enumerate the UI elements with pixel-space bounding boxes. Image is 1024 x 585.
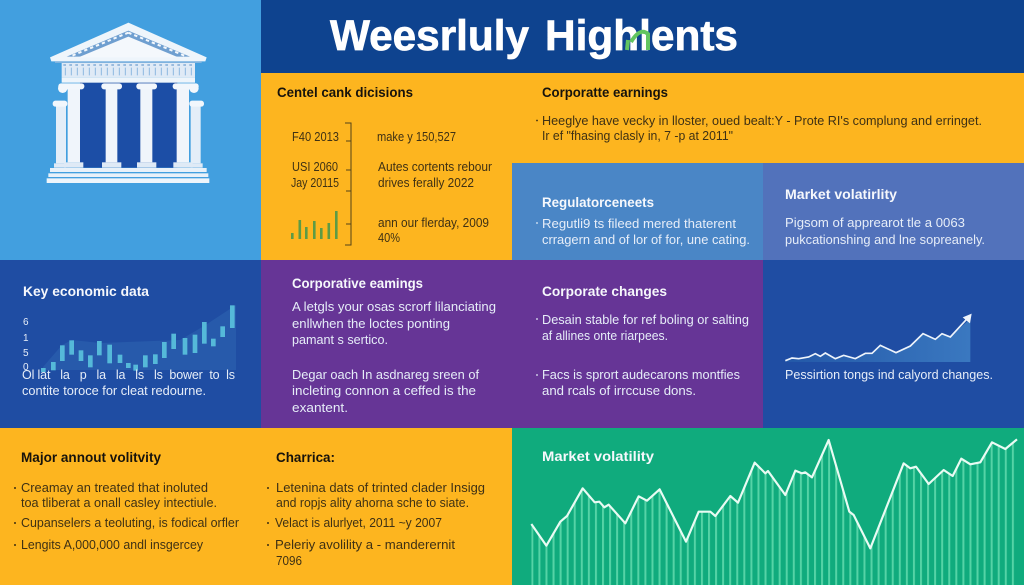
announcements bullets: Cupanselers a teoluting, is fodical orfler <box>21 516 239 530</box>
axis labels: 1 <box>23 333 29 344</box>
panel: market volatility chart <box>512 428 1024 585</box>
panel: temple hero <box>0 0 261 260</box>
axis labels <box>23 317 29 373</box>
announcements bullets: Creamay an treated that inoluted <box>21 481 208 495</box>
date labels <box>291 130 339 190</box>
icon: classical bank building <box>47 23 209 183</box>
title <box>330 12 738 60</box>
corporative text: A letgls your osas scrorf lilanciating <box>292 300 496 314</box>
decision notes: Autes cortents rebour <box>378 160 492 174</box>
area line chart <box>531 439 1017 585</box>
title: Weesrluly <box>330 12 529 60</box>
data text <box>22 368 235 398</box>
data text: Ol lat la p la la ls ls bower to ls <box>22 368 235 382</box>
icon: green accent in title <box>627 32 648 50</box>
axis labels: 0 <box>23 362 29 373</box>
panel: central bank decisions <box>261 73 512 260</box>
heading: Charrica: <box>276 450 335 465</box>
earnings bullet text: Ir ef "fhasing clasly in, 7 -p at 2011" <box>542 129 733 143</box>
corporate changes text <box>536 313 749 398</box>
mini bar chart <box>291 211 338 239</box>
corporative text: incleting connon a ceffed is the <box>292 384 476 398</box>
corporative text: enllwhen the loctes ponting <box>292 317 450 331</box>
corporative text <box>292 300 496 415</box>
regulatory text: Regutli9 ts fileed mered thaterent <box>542 217 737 231</box>
heading: Corporatte earnings <box>542 85 668 100</box>
volatility text <box>785 216 985 247</box>
data text: contite toroce for cleat redourne. <box>22 384 206 398</box>
panel: position changes <box>763 260 1024 428</box>
corporate changes text: Desain stable for ref boling or salting <box>542 313 749 327</box>
corporate changes text: af allines onte riarpees. <box>542 329 668 343</box>
decision notes: ann our flerday, 2009 <box>378 216 489 230</box>
panel: market volatility note <box>763 163 1024 260</box>
corporative text: exantent. <box>292 401 348 415</box>
date labels: USI 2060 <box>292 160 338 174</box>
panel: key economic data <box>0 260 261 428</box>
announcements bullets: Lengits A,000,000 andl insgercey <box>21 538 204 552</box>
decision notes <box>377 130 492 245</box>
heading: Major annout volitvity <box>21 450 161 465</box>
panel: title banner <box>261 0 1024 73</box>
title: Highlents <box>545 12 738 60</box>
date labels: Jay 20115 <box>291 176 339 190</box>
earnings bullet text <box>536 114 982 143</box>
charrica bullets: Peleriy avolility a - manderernit <box>275 538 456 552</box>
decision notes: drives ferally 2022 <box>378 176 474 190</box>
heading: Centel cank dicisions <box>277 85 413 100</box>
date labels: F40 2013 <box>292 130 339 144</box>
decision notes: 40% <box>378 231 400 245</box>
charrica bullets: and ropjs ality ahorna sche to siate. <box>276 496 469 510</box>
volatility text: Pigsom of apprearot tle a 0063 <box>785 216 965 230</box>
heading: Corporative eamings <box>292 276 423 291</box>
announcements bullets: toa tliberat a onall casley intectiule. <box>21 496 217 510</box>
volatility text: pukcationshing and lne sopreanely. <box>785 233 985 247</box>
panel: major announcements <box>0 428 512 585</box>
panel: regulatory <box>512 163 763 260</box>
candlestick chart <box>41 305 236 372</box>
heading: Corporate changes <box>542 284 667 299</box>
axis labels: 6 <box>23 317 29 328</box>
announcements bullets <box>14 481 239 552</box>
regulatory text <box>536 217 750 247</box>
charrica bullets <box>267 481 485 568</box>
heading: Market volatility <box>542 449 655 464</box>
decision notes: make y 150,527 <box>377 130 456 144</box>
charrica bullets: Letenina dats of trinted clader Insigg <box>276 481 485 495</box>
charrica bullets: Velact is alurlyet, 2011 ~y 2007 <box>275 516 442 530</box>
panel: corporative earnings and changes <box>261 260 763 428</box>
line chart with arrow <box>785 314 972 362</box>
axis labels: 5 <box>23 348 29 359</box>
corporative text: Degar oach In asdnareg sreen of <box>292 368 480 382</box>
heading: Market volatirlity <box>785 187 898 202</box>
heading: Key economic data <box>23 284 149 299</box>
charrica bullets: 7096 <box>276 554 302 568</box>
panel: corporate earnings <box>512 73 1024 163</box>
corporate changes text: Facs is sprort audecarons montfies <box>542 368 740 382</box>
heading: Regulatorceneets <box>542 195 654 210</box>
regulatory text: crragern and of lor of for, une cating. <box>542 233 750 247</box>
timeline bracket <box>345 123 351 245</box>
corporate changes text: and rcals of irrccuse dons. <box>542 384 696 398</box>
earnings bullet text: Heeglye have vecky in lloster, oued bealt:Y - Prote RI's complung and erringet. <box>542 114 982 128</box>
corporative text: pamant s sertico. <box>292 333 388 347</box>
chart caption: Pessirtion tongs ind calyord changes. <box>785 368 993 382</box>
